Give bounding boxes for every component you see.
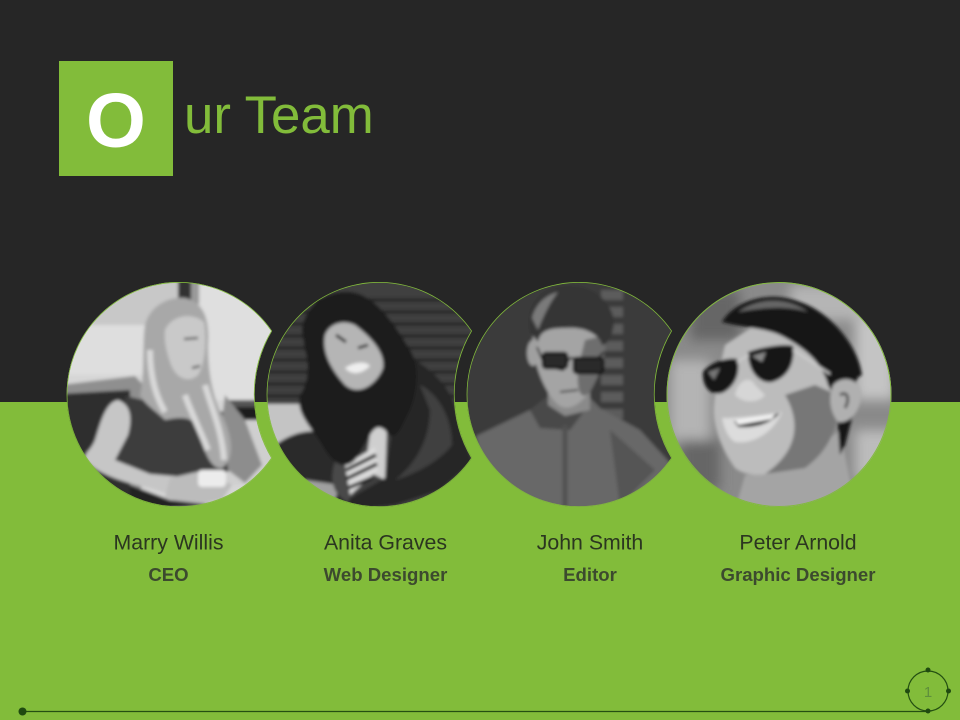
title text: ur Team (184, 86, 374, 145)
name and role: Peter Arnold (720, 530, 876, 585)
name and role: Peter Arnold: Peter Arnold (739, 530, 857, 554)
name and role: Anita Graves (324, 530, 447, 585)
name and role: Marry Willis: CEO (148, 564, 189, 585)
photo: Peter Arnold (660, 280, 900, 510)
name and role: John Smith: Editor (563, 564, 617, 585)
photo: Marry Willis (60, 280, 280, 510)
name and role: John Smith (537, 530, 643, 585)
title badge: green square with O (59, 61, 173, 176)
name and role: Anita Graves: Anita Graves (324, 530, 447, 554)
name and role: John Smith: John Smith (537, 530, 643, 554)
photo: John Smith (460, 280, 680, 510)
photo: Anita Graves (260, 280, 480, 510)
page number badge: 1 (924, 684, 932, 701)
name and role: Marry Willis (113, 530, 224, 585)
footer line with start dot (18, 708, 928, 716)
dark upper background (0, 0, 960, 402)
name and role: Marry Willis: Marry Willis (113, 530, 224, 554)
title badge: green square with O: O (86, 78, 146, 164)
name and role: Anita Graves: Web Designer (324, 564, 447, 585)
title (59, 61, 374, 176)
page number badge (905, 668, 951, 714)
name and role: Peter Arnold: Graphic Designer (720, 564, 876, 585)
